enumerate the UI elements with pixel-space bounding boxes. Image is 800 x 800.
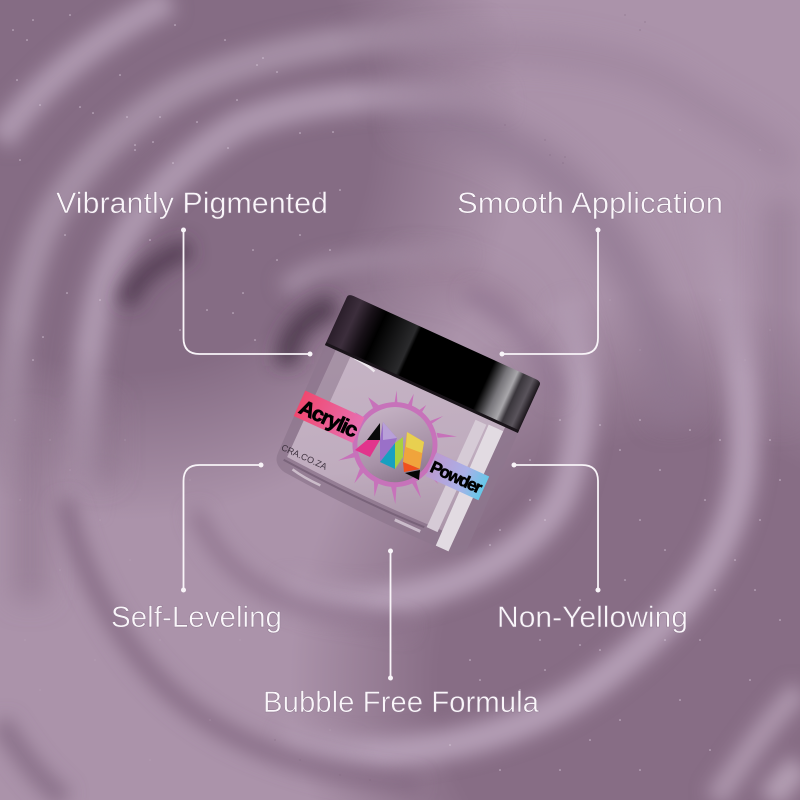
connector: Non-Yellowing <box>512 462 600 592</box>
white reflections on glass <box>421 419 503 551</box>
label: Self-Leveling: Self-Leveling <box>111 601 282 634</box>
label band: Powder: Powder <box>427 457 486 498</box>
label: Non-Yellowing: Non-Yellowing <box>497 601 688 634</box>
background flecks: dark specks <box>275 15 645 780</box>
label: Bubble Free Formula: Bubble Free Formula <box>263 686 539 719</box>
label: Vibrantly Pigmented: Vibrantly Pigmented <box>56 187 328 220</box>
connector: Self-Leveling <box>181 462 264 592</box>
label: Smooth Application: Smooth Application <box>457 187 723 220</box>
connector: Smooth Application <box>500 228 600 356</box>
product jar <box>268 294 543 559</box>
paint splash ring <box>311 368 471 520</box>
background sparkles: faint glitter <box>15 130 770 760</box>
jar lid <box>325 294 541 433</box>
small printed web address: CRA.CO.ZA <box>280 442 329 472</box>
logo mark: coloured facets <box>355 422 424 480</box>
label band: Acrylic: Acrylic <box>296 396 362 443</box>
connector: Bubble Free Formula <box>388 548 393 680</box>
connector: Vibrantly Pigmented <box>181 228 312 356</box>
jar body <box>268 343 521 559</box>
